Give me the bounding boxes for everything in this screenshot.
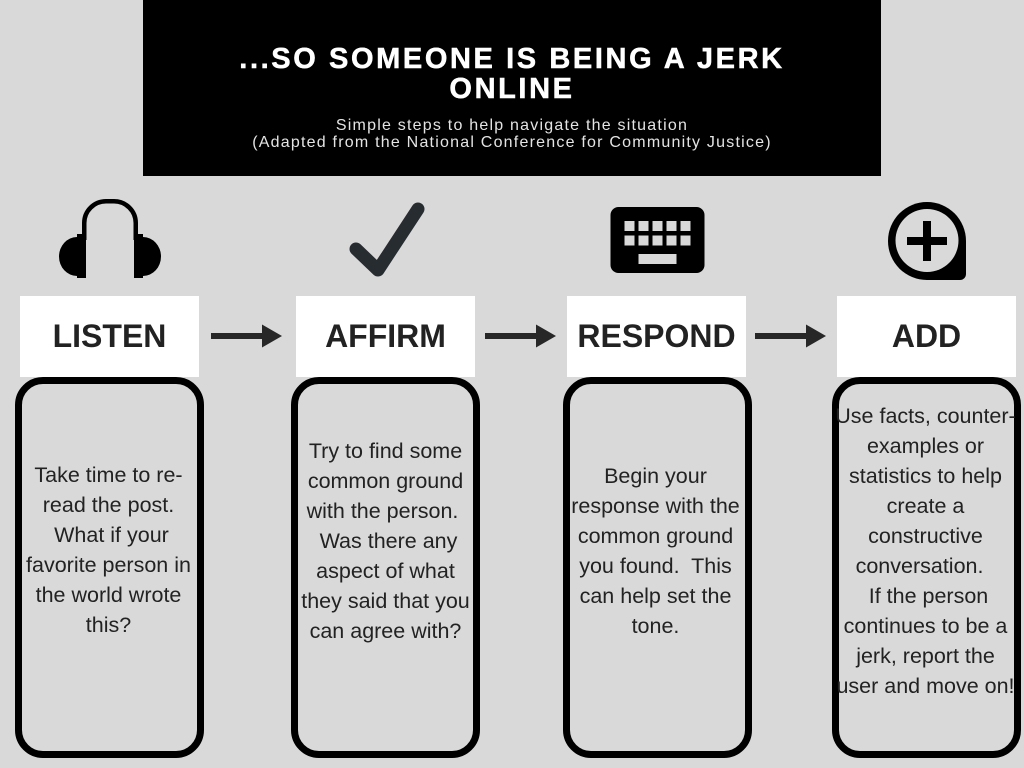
text: listen: Take time to re- — [34, 463, 183, 487]
text: add: constructive — [868, 524, 983, 548]
title banner — [143, 0, 881, 176]
panel: listen — [15, 377, 204, 758]
text: affirm: they said that you — [301, 589, 470, 613]
text: listen: this? — [86, 613, 131, 637]
panel: add — [832, 377, 1021, 758]
text: add: jerk, report the — [856, 644, 995, 668]
arrow: listen to affirm — [211, 324, 282, 348]
heading: respond: RESPOND — [577, 318, 736, 354]
subtitle — [252, 117, 772, 151]
heading: listen — [20, 296, 199, 377]
text: affirm: Was there any — [320, 529, 457, 553]
icon: headphones — [59, 199, 161, 278]
text: listen: read the post. — [43, 493, 174, 517]
title: ...SO SOMEONE IS BEING A JERK — [239, 43, 785, 75]
heading: listen: LISTEN — [53, 318, 166, 354]
text: affirm — [301, 439, 470, 643]
text: respond: response with the — [571, 494, 740, 518]
text: respond: you found. This — [579, 554, 732, 578]
text: affirm: aspect of what — [316, 559, 455, 583]
icon: check mark — [350, 202, 424, 276]
text: listen: favorite person in — [26, 553, 191, 577]
heading: add: ADD — [892, 318, 961, 354]
icon: keyboard — [610, 207, 704, 273]
text: add — [835, 404, 1016, 698]
title — [239, 43, 785, 105]
text: add: create a — [887, 494, 964, 518]
text: add: continues to be a — [844, 614, 1007, 638]
arrow: respond to add — [755, 324, 826, 348]
title: ONLINE — [449, 73, 575, 105]
text: add: conversation. — [856, 554, 983, 578]
text: listen: the world wrote — [36, 583, 181, 607]
heading: affirm: AFFIRM — [325, 318, 446, 354]
icon: plus in speech bubble — [888, 202, 966, 280]
text: add: statistics to help — [849, 464, 1002, 488]
text: listen: What if your — [54, 523, 169, 547]
heading: respond — [567, 296, 746, 377]
panel: affirm — [291, 377, 480, 758]
arrow: affirm to respond — [485, 324, 556, 348]
panel: respond — [563, 377, 752, 758]
text: affirm: common ground — [308, 469, 463, 493]
text: add: Use facts, counter- — [835, 404, 1016, 428]
heading: add — [837, 296, 1016, 377]
subtitle: (Adapted from the National Conference for Community Justice) — [252, 134, 772, 151]
text: respond: Begin your — [604, 464, 707, 488]
heading: affirm — [296, 296, 475, 377]
text: respond: common ground — [578, 524, 733, 548]
text: affirm: with the person. — [307, 499, 458, 523]
text: respond — [571, 464, 740, 638]
text: add: If the person — [869, 584, 988, 608]
text: add: examples or — [867, 434, 984, 458]
text: add: user and move on! — [836, 674, 1015, 698]
subtitle: Simple steps to help navigate the situation — [336, 117, 688, 134]
text: respond: tone. — [632, 614, 679, 638]
text: respond: can help set the — [580, 584, 731, 608]
text: affirm: can agree with? — [310, 619, 461, 643]
text: listen — [26, 463, 191, 637]
text: affirm: Try to find some — [309, 439, 462, 463]
